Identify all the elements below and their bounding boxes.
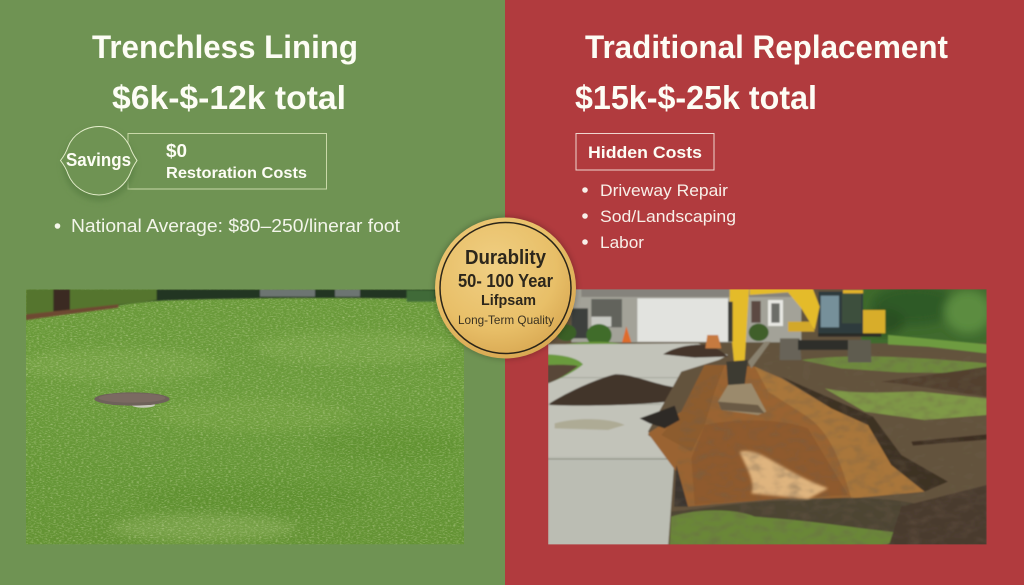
callout: savings restoration costs bbox=[60, 126, 326, 201]
badge: durability medal bbox=[434, 216, 577, 360]
foreground grass bbox=[671, 497, 912, 532]
item: labor bbox=[582, 234, 645, 252]
savings badge: Savings bbox=[66, 150, 131, 170]
trench bbox=[648, 364, 852, 508]
excavator bbox=[718, 285, 885, 415]
medal lifespan: Lifpsam bbox=[481, 292, 536, 309]
price: trenchless total: $6k-$-12k total bbox=[112, 79, 346, 116]
list: hidden cost items bbox=[582, 182, 736, 252]
house bbox=[571, 285, 801, 342]
photo: excavated trench with excavator bbox=[548, 285, 991, 548]
background trees bbox=[861, 285, 987, 343]
item: sod landscaping: Sod/Landscaping bbox=[600, 208, 736, 226]
soil piles bbox=[550, 374, 688, 406]
photo: intact lawn with manhole cover bbox=[20, 289, 464, 544]
panel: trenchless lining (green) bbox=[0, 0, 505, 585]
price: traditional total: $15k-$-25k total bbox=[575, 79, 817, 116]
medal title: Durablity bbox=[465, 247, 547, 269]
heading: trenchless lining: Trenchless Lining bbox=[92, 29, 358, 65]
medal years: 50- 100 Year bbox=[458, 271, 553, 291]
shrubs and cone bbox=[586, 324, 612, 346]
panel: traditional replacement (red) bbox=[505, 0, 1024, 585]
item: driveway repair: Driveway Repair bbox=[600, 182, 729, 200]
medal quality: Long-Term Quality bbox=[458, 313, 554, 327]
bullet: national average: National Average: $80–250/linerar foot bbox=[71, 215, 400, 236]
savings amount: $0 bbox=[166, 141, 187, 161]
callout: hidden costs bbox=[576, 134, 714, 170]
callout: hidden costs: Hidden Costs bbox=[588, 143, 702, 162]
manhole cover bbox=[94, 392, 170, 408]
item: labor: Labor bbox=[600, 234, 645, 252]
lawn and churned soil bbox=[648, 360, 719, 544]
soil texture bbox=[670, 352, 987, 548]
heading: traditional replacement: Traditional Replacement bbox=[585, 29, 948, 65]
savings label: Restoration Costs bbox=[166, 165, 307, 182]
callout box bbox=[128, 134, 326, 189]
savings badge bbox=[60, 126, 137, 201]
driveway bbox=[548, 342, 728, 458]
